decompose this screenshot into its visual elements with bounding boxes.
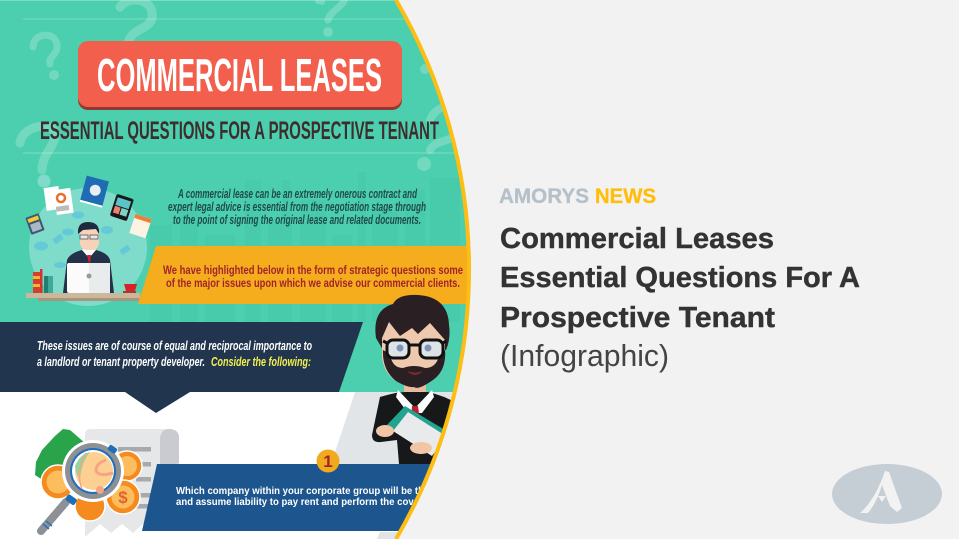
main title: COMMERCIAL LEASES <box>97 49 382 101</box>
person at laptop <box>63 222 114 293</box>
magnifier handle <box>41 502 66 531</box>
article heading: Essential Questions For A <box>500 262 860 294</box>
floating blue doodles <box>34 212 131 268</box>
callout text: Consider the following: <box>211 354 311 369</box>
suit <box>372 392 456 464</box>
question text <box>176 485 424 508</box>
highlight text: We have highlighted below in the form of strategic questions some <box>163 263 463 277</box>
yellow arc border <box>396 0 469 539</box>
highlight text <box>163 263 463 290</box>
blue question panel <box>142 464 480 531</box>
intro text block: to the point of signing the original lease and related documents. <box>173 212 421 227</box>
illustration: lawyer at desk <box>25 174 152 306</box>
neck <box>404 384 426 392</box>
collar <box>396 390 434 413</box>
eyes <box>396 344 432 352</box>
brand label: AMORYS <box>499 185 589 208</box>
intro text block: expert legal advice is essential from the negotiation stage through <box>168 199 426 214</box>
tie <box>412 406 420 415</box>
article heading: (Infographic) <box>500 338 669 373</box>
decorative question marks <box>20 0 458 171</box>
grey backdrop lower strip <box>377 532 398 539</box>
panel: infographic preview <box>0 0 480 539</box>
coin faces <box>46 456 137 508</box>
illustration: bearded man with glasses <box>372 295 456 464</box>
brand label <box>499 185 656 208</box>
folder <box>386 406 443 456</box>
intro text block <box>168 186 426 227</box>
green banknotes <box>35 429 84 479</box>
article heading: Prospective Tenant <box>500 302 775 334</box>
mouth <box>407 371 423 375</box>
hair back <box>375 295 450 350</box>
question text: Which company within your corporate group will be th <box>176 485 424 497</box>
grey backdrop behind man <box>335 392 452 464</box>
icon: tablet <box>110 194 134 221</box>
number badge: 1 <box>323 452 333 471</box>
icon: notepad <box>129 214 152 238</box>
callout text <box>37 338 312 369</box>
city skyline background <box>150 172 460 322</box>
books on desk <box>33 269 53 293</box>
intro text block: A commercial lease can be an extremely onerous contract and <box>177 186 418 201</box>
number badge <box>316 450 340 472</box>
brand label: NEWS <box>595 185 656 208</box>
orange highlight band <box>138 246 480 304</box>
hands <box>376 425 432 454</box>
icon: calculator <box>25 213 45 235</box>
coins <box>41 451 142 521</box>
desk <box>26 293 140 301</box>
question text: and assume liability to pay rent and perform the cove <box>176 496 419 508</box>
navy callout with pointer <box>0 322 363 413</box>
icon: blue book <box>80 176 109 208</box>
icon: report sheets <box>44 186 74 215</box>
red coffee cup <box>123 284 137 293</box>
callout text: a landlord or tenant property developer. <box>37 354 205 369</box>
logo <box>832 464 942 524</box>
magnifier lens <box>62 440 124 506</box>
beard <box>383 350 445 388</box>
dollar sign on coin: $ <box>118 488 128 507</box>
article heading <box>500 223 860 373</box>
face <box>382 322 445 386</box>
highlight text: of the major issues upon which we advise our commercial clients. <box>166 276 460 290</box>
subtitle: ESSENTIAL QUESTIONS FOR A PROSPECTIVE TENANT <box>40 117 439 145</box>
title banner <box>78 41 402 110</box>
glasses <box>383 340 446 358</box>
article heading: Commercial Leases <box>500 223 774 255</box>
callout text: These issues are of course of equal and reciprocal importance to <box>37 338 312 353</box>
receipt <box>85 429 179 537</box>
illustration: money under magnifying glass <box>35 429 179 537</box>
